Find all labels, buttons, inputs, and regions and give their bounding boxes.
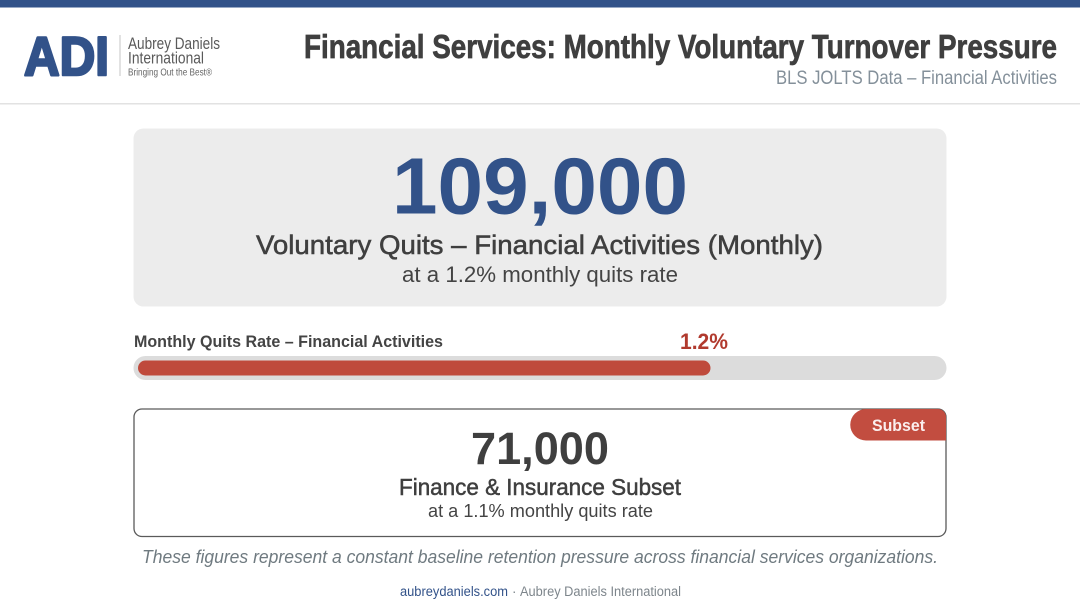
footer: aubreydaniels.com [400, 584, 508, 599]
bar track [134, 356, 946, 380]
logo wordmark: International [128, 50, 204, 68]
top accent bar [0, 0, 1080, 8]
badge: subset: Subset [872, 417, 925, 435]
subset note: at a 1.1% monthly quits rate [428, 501, 653, 521]
footer: · [512, 584, 516, 599]
footer [400, 584, 681, 599]
subset label: Finance & Insurance Subset [399, 474, 682, 500]
statistic label: Voluntary Quits – Financial Activities (Monthly) [256, 230, 823, 260]
big number: 109,000 [392, 142, 688, 230]
closing statement: These figures represent a constant baseline retention pressure across financial services organizations. [142, 547, 938, 567]
bar label: Monthly Quits Rate – Financial Activities [134, 332, 443, 351]
logo wordmark: Bringing Out the Best® [128, 66, 212, 78]
panel: finance and insurance subset [134, 409, 946, 536]
bar value: 1.2% [680, 329, 728, 354]
logo mark: ADI: ADI [24, 25, 109, 87]
footer: Aubrey Daniels International [520, 584, 681, 599]
progress bar: monthly quits rate [134, 329, 946, 380]
header [0, 25, 1080, 104]
logo wordmark: Aubrey Daniels [128, 35, 220, 53]
statistic note: at a 1.2% monthly quits rate [402, 262, 678, 287]
badge: subset [850, 409, 946, 440]
bar fill [138, 360, 710, 376]
logo [24, 25, 220, 87]
panel: headline statistic [134, 128, 946, 306]
subset number: 71,000 [471, 423, 609, 474]
logo wordmark [128, 35, 220, 78]
